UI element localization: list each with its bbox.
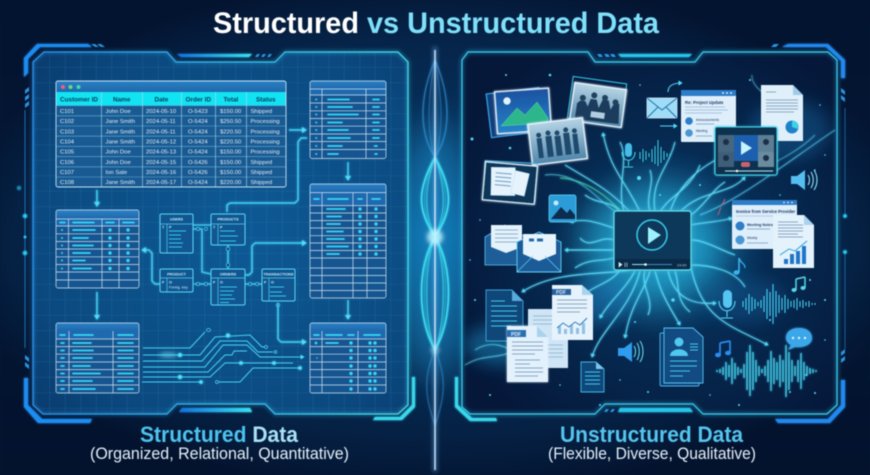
- email window: project update: Announcements: [696, 118, 719, 122]
- flow arrows between tables: [97, 130, 348, 342]
- main customer table: C102: [60, 119, 74, 125]
- email window: project update: Re: Project Update: [685, 100, 724, 105]
- icon: speaker: [791, 170, 817, 190]
- video call window: [715, 127, 777, 175]
- main customer table: C101: [60, 109, 74, 115]
- main customer table: Processing: [250, 119, 280, 125]
- icon: music notes: [715, 258, 806, 357]
- entity: product: [160, 269, 193, 292]
- main customer table: Jane Smith: [106, 140, 135, 146]
- main customer table: Processing: [250, 140, 280, 146]
- table: top right: [310, 81, 386, 158]
- entity: product: O: [169, 280, 172, 284]
- main customer table: 2024-05-16: [146, 170, 177, 176]
- document: resume profile: [660, 328, 703, 386]
- entity: orders: ORDERS: [220, 272, 237, 276]
- main customer table: Jane Smith: [106, 180, 135, 186]
- document with bar chart: [773, 215, 814, 268]
- heading: structured data: [90, 422, 349, 463]
- main customer table: Processing: [250, 129, 280, 135]
- subheading: unstructured qualities: (Flexible, Diverse, Qualitative): [548, 445, 756, 463]
- table: right middle: [310, 184, 386, 298]
- subheading: structured qualities: (Organized, Relational, Quantitative): [90, 445, 349, 463]
- main customer table: $220.50: [220, 129, 242, 135]
- entity: transactions: F: [264, 280, 267, 284]
- main customer table: 2024-05-13: [146, 150, 177, 156]
- main customer table: Total: [224, 96, 239, 104]
- center divider: twisting light strands: [405, 47, 465, 472]
- main customer table: John Doe: [106, 109, 131, 115]
- panel frame: unstructured: [455, 44, 847, 423]
- main customer table: $150.00: [220, 160, 242, 166]
- heading: unstructured data: Unstructured Data: [560, 422, 744, 447]
- icon: envelopes with letters: [485, 225, 561, 272]
- document: dark file: [486, 290, 523, 341]
- invoice window: Weekly: [747, 236, 758, 240]
- main customer table: 2024-05-11: [146, 119, 176, 125]
- panel frame: structured: [17, 44, 415, 423]
- invoice window: Invoice from Service Provider: [736, 209, 795, 214]
- entity: transactions: O: [271, 280, 274, 284]
- heading: unstructured data: [548, 422, 756, 463]
- main customer table: O-5424: [188, 150, 208, 156]
- invoice window: [732, 200, 797, 249]
- entity: product: Foreig. key: [169, 286, 188, 290]
- document with pie chart: [761, 85, 803, 141]
- ER diagram: [160, 214, 295, 307]
- icon: envelope: [647, 83, 682, 126]
- table: bottom right: [310, 323, 386, 393]
- main customer table: Shipped: [250, 160, 272, 166]
- main customer table: 2024-05-10: [146, 109, 177, 115]
- image card: group photo: [528, 118, 587, 165]
- main customer table: O-5424: [188, 180, 208, 186]
- sound wave: lower: [713, 345, 816, 397]
- central video player: 24:00: [677, 264, 687, 268]
- main customer table: O-5426: [188, 170, 208, 176]
- main customer table: John Doe: [106, 160, 131, 166]
- entity: products: P: [220, 226, 223, 230]
- image card: landscape: [486, 88, 551, 138]
- invoice window: Meeting Notes: [747, 223, 773, 227]
- main customer table: Ion Sale: [106, 170, 128, 176]
- main customer table: C106: [60, 160, 75, 166]
- entity: users: P: [169, 226, 172, 230]
- main customer table: Name: [113, 96, 131, 104]
- main customer table: Status: [256, 96, 276, 104]
- main customer table: John Doe: [106, 150, 131, 156]
- icon: image tile: [549, 195, 576, 222]
- circuit data lines: [142, 328, 304, 384]
- document: back report: [528, 309, 568, 368]
- panel: structured data: [17, 44, 415, 423]
- entity: transactions: TRANSACTIONS: [263, 272, 294, 276]
- main customer table: $220.00: [220, 180, 242, 186]
- main customer table: O-5424: [188, 119, 208, 125]
- main customer table: Customer ID: [60, 96, 98, 104]
- entity: product: PRODUCT: [167, 272, 187, 276]
- main customer table: C108: [60, 180, 75, 186]
- icon: microphone with sound wave: [622, 140, 670, 167]
- main customer table: O-5424: [188, 129, 208, 135]
- document: pdf with chart: [552, 285, 593, 340]
- main customer table: C103: [60, 129, 75, 135]
- main customer table: $220.50: [220, 140, 242, 146]
- main customer table: O-5423: [188, 109, 208, 115]
- entity: orders: O: [220, 280, 223, 284]
- main customer table: [56, 81, 286, 187]
- central video player: [614, 211, 691, 270]
- entity: products: PRODUCTS: [217, 218, 239, 222]
- entity: users: [160, 214, 193, 253]
- main customer table: O-5424: [188, 140, 208, 146]
- entity: orders: F: [213, 280, 216, 284]
- main customer table: $150.00: [220, 109, 242, 115]
- main customer table: $150.00: [220, 170, 242, 176]
- icon: speaker lower: [618, 341, 643, 362]
- entity: transactions: [262, 269, 295, 301]
- main customer table: 2024-05-15: [146, 160, 177, 166]
- main customer table: C104: [60, 140, 75, 146]
- title: Structured vs Unstructured Data: [213, 7, 659, 40]
- document: pdf front: PDF: [511, 332, 521, 338]
- panel: unstructured data: [455, 44, 847, 423]
- entity: users: T: [162, 226, 165, 230]
- document: small file: [581, 362, 604, 392]
- sound wave: upper: [740, 284, 815, 324]
- document: pdf front: [507, 326, 548, 382]
- icon: microphone lower: [719, 290, 735, 318]
- image card: team photo: [567, 76, 627, 127]
- main customer table: 2024-05-12: [146, 140, 176, 146]
- data nebula and filaments: [464, 74, 835, 406]
- main customer table: Jane Smith: [106, 119, 135, 125]
- chat bubble: [786, 328, 812, 350]
- main customer table: Order ID: [186, 96, 211, 104]
- main customer table: Jane Smith: [106, 129, 135, 135]
- main customer table: C105: [60, 150, 75, 156]
- entity: products: [211, 214, 245, 245]
- main customer table: Shipped: [250, 109, 272, 115]
- entity: product: F: [162, 280, 165, 284]
- entity: products: T: [213, 226, 216, 230]
- heading: structured data: Structured Data: [140, 422, 299, 447]
- main customer table: $150.00: [220, 150, 242, 156]
- table: bottom left: [56, 323, 139, 393]
- email window: project update: Meeting: [696, 129, 708, 133]
- main customer table: Shipped: [250, 180, 272, 186]
- main customer table: Shipped: [250, 170, 272, 176]
- image card: paper documents: [482, 159, 538, 204]
- main customer table: O-5426: [188, 160, 208, 166]
- main customer table: 2024-05-17: [146, 180, 176, 186]
- document: pdf with chart: PDF: [556, 290, 566, 296]
- main customer table: $250.50: [220, 119, 242, 125]
- email window: project update: [681, 90, 736, 142]
- entity: orders: [211, 269, 245, 305]
- table: left middle: [56, 210, 139, 288]
- main customer table: Date: [154, 96, 169, 104]
- main customer table: C107: [60, 170, 74, 176]
- main customer table: 2024-05-11: [146, 129, 176, 135]
- entity: users: USERS: [170, 218, 184, 222]
- main customer table: Processing: [250, 150, 280, 156]
